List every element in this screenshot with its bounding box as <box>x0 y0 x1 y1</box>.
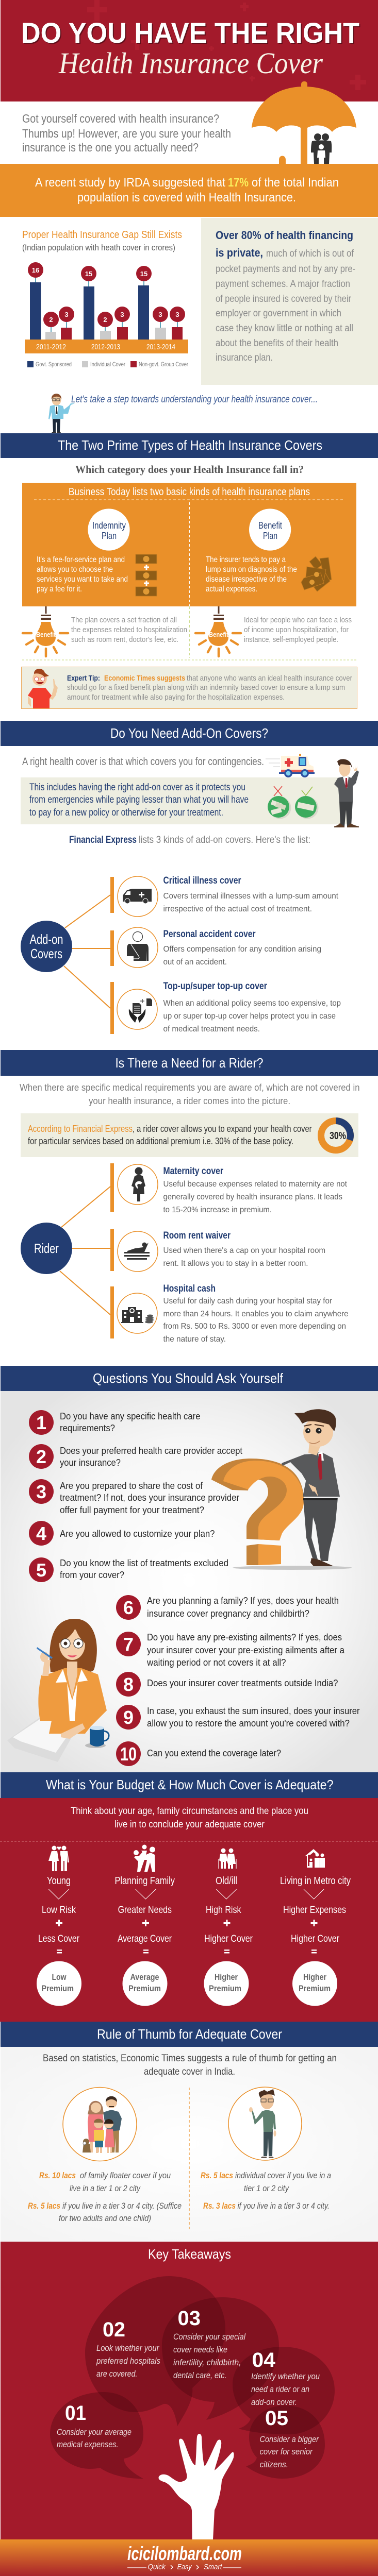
caption: step towards understanding: Let's take a step towards understanding your health insurance cover... <box>71 394 318 405</box>
heading band: rider <box>1 1050 378 1076</box>
question 4: 4 <box>36 1523 46 1544</box>
bar chart: health insurance gap: Proper Health Insurance Gap Still Exists <box>22 229 182 241</box>
hospital cash text: Useful for daily cash during your hospital stay for <box>163 1297 333 1306</box>
takeaway 02: Look whether your <box>96 2343 160 2353</box>
icon: raised hand <box>159 2434 234 2539</box>
column: young: Less Cover <box>38 1934 80 1944</box>
indemnity plan badge: Plan <box>102 531 117 541</box>
column: old or ill: Premium <box>209 1984 241 1993</box>
panel: IRDA statistic: 17% <box>228 176 249 190</box>
panel: IRDA statistic: population is covered with Health Insurance. <box>77 191 296 205</box>
panel: header <box>1 0 378 101</box>
maternity text: to 15-20% increase in premium. <box>163 1206 272 1214</box>
panel: budget <box>0 1798 378 2022</box>
bar chart: health insurance gap: 2011-2012 <box>36 343 66 351</box>
panel: expert tip: Economic Times suggests <box>104 674 185 683</box>
column: young: Young <box>47 1875 71 1887</box>
icon: woman with papers <box>7 1619 109 1762</box>
donut chart: 30% <box>321 1121 351 1150</box>
panel: expert tip: Expert Tip: <box>67 674 100 683</box>
donut chart: 30%: 30% <box>330 1130 346 1142</box>
icon: house with family <box>305 1849 325 1868</box>
column: planning family: Greater Needs <box>118 1905 172 1916</box>
question 10 <box>116 1741 281 1766</box>
panel: rider premium: for particular services based on additional premium i.e. 30% of the base policy. <box>28 1136 293 1146</box>
bar chart: health insurance gap <box>22 229 188 368</box>
panel: budget: live in to conclude your adequate cover <box>114 1819 265 1830</box>
question 6 <box>116 1595 339 1620</box>
text: plan covers fraction <box>71 616 187 644</box>
icon: expert character <box>28 669 58 708</box>
bar chart: health insurance gap: 3 <box>175 311 179 318</box>
icon: benefit bulb left: Benefit <box>36 631 56 638</box>
bar chart: health insurance gap: 3 <box>64 311 69 318</box>
question 8: Does your insurer cover treatments outside India? <box>147 1678 338 1688</box>
maternity text: Maternity cover <box>163 1166 223 1177</box>
text: ideal for people: instance, self-employed people. <box>244 635 338 644</box>
panel: rule of thumb: Based on statistics, Economic Times suggests a rule of thumb for getting an <box>43 2053 337 2064</box>
icon: personal accident sling <box>118 927 158 968</box>
takeaway 01: Consider your average <box>57 2427 132 2437</box>
top-up text: Top-up/super top-up cover <box>163 981 267 992</box>
takeaway 05: cover for senior <box>260 2447 313 2456</box>
heading band: two prime types: The Two Prime Types of Health Insurance Covers <box>58 437 322 453</box>
bar chart: health insurance gap: 15 <box>140 270 147 278</box>
rider node <box>21 1223 72 1274</box>
question 5: Do you know the list of treatments excluded <box>60 1558 228 1568</box>
panel: expert tip: amount for treatment while also paying for the hospitalization expenses. <box>67 693 285 702</box>
text: plan covers fraction: the expenses related to hospitalization <box>71 625 187 634</box>
text: individual cover amounts <box>201 2171 331 2211</box>
panel: health financing: insurance plan. <box>216 352 273 363</box>
bar chart: health insurance gap: 2 <box>103 316 107 324</box>
column: living in metro city: Higher Expenses <box>283 1905 346 1916</box>
chart legend: Govt. Sponsored <box>36 361 72 368</box>
heading band: rule of thumb: Rule of Thumb for Adequate Cover <box>97 2026 282 2042</box>
top-up text: of medical treatment needs. <box>163 1025 260 1033</box>
icon: maternity <box>118 1164 158 1205</box>
indemnity description: pay a fee for it. <box>37 585 82 594</box>
intro text: insurance is the one you actually need? <box>22 141 199 154</box>
benefit plan badge: Plan <box>263 531 277 541</box>
text: family cover amounts: Rs. 10 lacs <box>39 2171 76 2180</box>
question 5: from your cover? <box>60 1570 124 1580</box>
hospital cash text: from Rs. 500 to Rs. 3000 or even more depending on <box>163 1322 346 1331</box>
takeaway 04: 04 <box>252 2349 276 2371</box>
benefit description: actual expenses. <box>206 585 257 594</box>
text: family cover amounts: live in a tier 1 or 2 city <box>70 2183 141 2193</box>
icon: umbrella <box>252 81 356 164</box>
add-on node: Covers <box>30 946 62 961</box>
room rent text: Used when there's a cap on your hospital room <box>163 1246 325 1255</box>
panel: includes add-on: This includes having the right add-on cover as it protects you <box>29 782 245 793</box>
benefit plan badge <box>249 509 291 551</box>
text: individual cover amounts: individual cover if you live in a <box>235 2171 331 2180</box>
chart legend <box>27 361 188 368</box>
panel: questions <box>1 1391 378 1772</box>
intro text: Thumbs up! However, are you sure your health <box>22 127 231 140</box>
text: family cover amounts: for two adults and one child) <box>59 2213 151 2223</box>
takeaway 01 <box>57 2402 132 2449</box>
chart legend: Non-govt. Group Cover <box>139 361 188 368</box>
column: living in metro city <box>280 1849 351 2006</box>
panel: expert tip: should go for a fixed benefit plan along with an indemnity based cover to ensure a lump sum <box>67 683 345 692</box>
panel: expert tip: that anyone who wants an ideal health insurance cover <box>187 674 352 683</box>
icon: rupee notes <box>136 554 157 596</box>
takeaway 02: preferred hospitals <box>96 2356 160 2366</box>
column: old or ill: Old/ill <box>216 1875 237 1887</box>
text: financial express list <box>69 835 310 845</box>
question 2: your insurance? <box>60 1458 121 1468</box>
question 5: 5 <box>36 1560 46 1581</box>
personal accident text: Personal accident cover <box>163 929 256 940</box>
question 9: In case, you exhaust the sum insured, does your insurer <box>147 1706 360 1716</box>
question 3: treatment? If not, does your insurance provider <box>60 1493 239 1503</box>
question 9: 9 <box>123 1707 134 1728</box>
footer brand band: Smart <box>204 2563 222 2571</box>
column: old or ill: Higher <box>215 1972 238 1982</box>
takeaway 05: Consider a bigger <box>260 2434 319 2444</box>
icon: money pile <box>301 556 332 591</box>
text: ideal for people: Ideal for people who can face a loss <box>244 616 352 624</box>
panel: key takeaways <box>1 2242 378 2539</box>
column: planning family: Premium <box>128 1984 161 1993</box>
panel: budget: Think about your age, family circumstances and the place you <box>71 1806 308 1817</box>
takeaway 04: add-on cover. <box>251 2397 297 2407</box>
panel: IRDA statistic: A recent study by IRDA suggested that <box>35 176 225 190</box>
heading band: budget: What is Your Budget & How Much Cover is Adequate? <box>46 1777 333 1792</box>
maternity text: Useful because expenses related to maternity are not <box>163 1180 348 1189</box>
heading band: add-on covers <box>1 721 378 746</box>
heading band: two prime types <box>1 433 378 458</box>
panel: health financing: payment schemes. A major fraction <box>216 279 350 290</box>
panel: health financing: about the benefits of their health <box>216 338 338 349</box>
question 1: 1 <box>36 1412 46 1433</box>
icon: individual man <box>228 2087 302 2160</box>
panel: rule of thumb: adequate cover in India. <box>144 2066 235 2077</box>
add-on node: Add-on <box>30 931 63 947</box>
hospital cash text: more than 24 hours. It enables you to claim anywhere <box>163 1310 349 1318</box>
column: young: Low Risk <box>42 1905 76 1916</box>
takeaway 02: are covered. <box>96 2369 137 2379</box>
column: living in metro city: Higher Cover <box>291 1934 340 1944</box>
footer brand band: Quick <box>148 2563 166 2571</box>
title line 2: Health Insurance Cover <box>58 46 323 80</box>
text: individual cover amounts: if you live in a tier 3 or 4 city. <box>237 2201 330 2211</box>
question 4 <box>29 1521 215 1546</box>
room rent text: Room rent waiver <box>163 1230 231 1241</box>
heading band: budget <box>1 1772 378 1798</box>
question 9: allow you to restore the amount you're covered with? <box>147 1718 350 1728</box>
column: old or ill: High Risk <box>206 1905 241 1916</box>
heading band: rider: Is There a Need for a Rider? <box>116 1055 263 1071</box>
maternity text: generally covered by health insurance plans. It leads <box>163 1193 342 1201</box>
heading: key takeaways: Key Takeaways <box>148 2246 231 2262</box>
panel: health financing <box>201 218 378 385</box>
column: young <box>37 1845 81 2006</box>
text: financial express list: Financial Express <box>69 835 137 845</box>
footer brand band: icicilombard.com <box>127 2543 242 2564</box>
text: right health cover: A right health cover is that which covers you for contingencies. <box>22 756 264 768</box>
question 2: Does your preferred health care provider accept <box>60 1446 242 1456</box>
panel: rule of thumb <box>1 2047 378 2242</box>
takeaway 01: 01 <box>65 2402 86 2425</box>
text: rider intro <box>20 1082 360 1106</box>
panel: health financing: Over 80% of health financing <box>216 229 353 242</box>
panel: includes add-on: from emergencies while paying lesser than what you will have <box>29 794 249 805</box>
icon: top-up document hands <box>117 989 157 1029</box>
question 1 <box>29 1410 200 1435</box>
benefit plan badge: Benefit <box>258 520 282 531</box>
panel: health financing: much of which is out of <box>266 248 354 259</box>
panel: two plan types <box>22 483 356 606</box>
text: individual cover amounts: Rs. 3 lacs <box>203 2201 236 2211</box>
question 3: 3 <box>36 1481 46 1502</box>
critical illness text: Covers terminal illnesses with a lump-sum amount <box>163 892 339 901</box>
indemnity description: allows you to choose the <box>37 565 113 574</box>
text: family cover amounts: if you live in a tier 3 or 4 city. (Suffice <box>62 2201 182 2211</box>
personal accident text <box>163 929 321 967</box>
column: old or ill: Higher Cover <box>204 1934 253 1944</box>
takeaway 03: dental care, etc. <box>173 2370 227 2380</box>
diagram: rider tree <box>21 1163 349 1344</box>
text: rider intro: When there are specific medical requirements you are aware of, which are not covered in <box>20 1082 360 1093</box>
bar chart: health insurance gap: 3 <box>158 311 162 318</box>
icon: hospital bed <box>118 1231 158 1272</box>
indemnity description: It's a fee-for-service plan and <box>37 555 125 564</box>
icon: check and less money <box>295 787 319 819</box>
takeaway 03: Consider your special <box>173 2332 246 2342</box>
question 8: 8 <box>123 1674 134 1695</box>
panel: health financing: pocket payments and not by any pre- <box>216 264 355 275</box>
column: young: Low <box>52 1972 67 1982</box>
question 3: offer full payment for your treatment? <box>60 1505 204 1515</box>
hospital cash text <box>163 1283 349 1344</box>
icon: elderly couple <box>219 1849 236 1869</box>
column: living in metro city: Living in Metro city <box>280 1875 351 1887</box>
panel: health financing: case they know little or nothing at all <box>216 323 353 334</box>
personal accident text: out of an accident. <box>163 958 227 967</box>
text: rider intro: your health insurance, a rider comes into the picture. <box>89 1096 290 1106</box>
intro text: Got yourself covered with health insurance? <box>22 112 219 125</box>
takeaway 01: medical expenses. <box>57 2439 119 2449</box>
benefit description: The insurer tends to pay a <box>206 555 286 564</box>
takeaway 05 <box>260 2407 319 2469</box>
question 8 <box>116 1672 338 1697</box>
icon: benefit bulb right: Benefit <box>209 631 229 638</box>
question 7: Do you have any pre-existing ailments? If yes, does <box>147 1632 342 1642</box>
question 7: waiting period or not covers it at all? <box>146 1657 286 1668</box>
column: living in metro city: Higher <box>303 1972 326 1982</box>
takeaway 03: cover needs like <box>173 2345 227 2354</box>
panel: rider premium: , a rider cover allows you to expand your health cover <box>133 1124 311 1134</box>
bar chart: health insurance gap: 15 <box>85 270 92 278</box>
bar chart: health insurance gap: 3 <box>120 311 124 318</box>
question 7: your insurer cover your pre-existing ailments after a <box>147 1645 345 1655</box>
add-on node <box>21 921 72 972</box>
icon: thinking man <box>282 1409 340 1566</box>
heading band: rule of thumb <box>1 2022 378 2047</box>
text: individual cover amounts: Rs. 5 lacs <box>201 2171 233 2180</box>
icon: couple <box>48 1845 69 1871</box>
heading band: questions: Questions You Should Ask Yourself <box>93 1370 284 1386</box>
heading band: add-on covers: Do You Need Add-On Covers? <box>110 725 268 741</box>
panel: expert tip <box>22 667 357 709</box>
room rent text: rent. It allows you to stay in a better room. <box>163 1259 308 1268</box>
takeaway 04: Identify whether you <box>251 2371 320 2381</box>
panel: IRDA statistic <box>0 164 378 217</box>
takeaway 04 <box>251 2349 320 2407</box>
icon: ambulance <box>266 754 315 777</box>
question 5 <box>29 1557 228 1582</box>
bar chart: health insurance gap: 2 <box>49 316 53 324</box>
text: ideal for people: of income upon hospitalization, for <box>244 625 349 634</box>
question 3 <box>29 1479 239 1515</box>
icon: question mark <box>211 1459 352 1570</box>
column: living in metro city: Premium <box>299 1984 331 1993</box>
question 3: Are you prepared to share the cost of <box>60 1481 203 1491</box>
text: ideal for people <box>244 616 352 644</box>
indemnity plan badge <box>88 509 130 551</box>
takeaway 03: infertility, childbirth, <box>173 2358 241 2367</box>
panel: health financing: of people insured is covered by their <box>216 294 352 304</box>
question 1: requirements? <box>60 1423 115 1433</box>
takeaway 05: 05 <box>265 2407 288 2430</box>
panel: includes add-on: to pay for a new policy or otherwise for your treatment. <box>29 807 223 818</box>
rider node: Rider <box>34 1241 59 1256</box>
bar chart: health insurance gap: 2012-2013 <box>91 343 120 351</box>
question 4: Are you allowed to customize your plan? <box>60 1529 215 1539</box>
takeaway 04: need a rider or an <box>251 2384 309 2394</box>
column: planning family: Average Cover <box>118 1934 172 1944</box>
panel: health financing: is private, <box>216 246 263 259</box>
column: planning family: Planning Family <box>114 1875 175 1887</box>
critical illness text: Critical illness cover <box>163 875 241 886</box>
column: planning family <box>114 1844 175 2006</box>
critical illness text <box>163 875 339 913</box>
subheading: which category: Which category does your Health Insurance fall in? <box>75 463 304 476</box>
icon: family <box>311 133 332 164</box>
top-up text: up or super top-up cover helps protect you in case <box>163 1012 336 1021</box>
bar chart: health insurance gap: 16 <box>32 266 39 274</box>
question 6: insurance cover pregnancy and childbirth? <box>147 1608 309 1619</box>
hospital cash text: Hospital cash <box>163 1283 216 1294</box>
takeaway 02 <box>96 2318 160 2379</box>
critical illness text: irrespective of the actual cost of treatment. <box>163 905 312 913</box>
panel: rider premium <box>21 1113 358 1157</box>
question 6: Are you planning a family? If yes, does your health <box>147 1596 339 1606</box>
panel: IRDA statistic: of the total Indian <box>252 176 339 190</box>
icon: hospital cash <box>117 1293 157 1333</box>
icon: parents lifting child <box>134 1844 155 1872</box>
text: financial express list: lists 3 kinds of add-on covers. Here's the list: <box>139 835 310 845</box>
benefit description: disease irrespective of the <box>206 575 287 584</box>
text: family cover amounts: of family floater cover if you <box>80 2171 171 2180</box>
room rent text <box>163 1230 325 1268</box>
indemnity plan badge: Indemnity <box>92 520 126 531</box>
column: planning family: Average <box>130 1972 159 1982</box>
icon: presenter man <box>48 394 75 433</box>
diagram: add-on covers tree <box>21 875 341 1034</box>
text: plan covers fraction: The plan covers a set fraction of all <box>71 616 177 624</box>
chart legend: Individual Cover <box>90 361 125 368</box>
question 6: 6 <box>123 1597 134 1618</box>
takeaway 05: citizens. <box>260 2460 288 2469</box>
footer brand band <box>0 2539 378 2576</box>
benefit description <box>206 555 297 594</box>
text: family cover amounts: Rs. 5 lacs <box>28 2201 60 2211</box>
text: plan covers fraction: such as room rent, doctor's fee, etc. <box>71 635 178 644</box>
takeaway 02: 02 <box>103 2318 125 2341</box>
text: family cover amounts <box>28 2171 182 2223</box>
question 2: 2 <box>36 1446 46 1467</box>
icon: benefit bulb left <box>23 606 68 656</box>
question 1: Do you have any specific health care <box>60 1411 200 1421</box>
top-up text <box>163 981 341 1033</box>
bar chart: health insurance gap: (Indian population with heath cover in crores) <box>22 243 175 252</box>
question 2 <box>29 1444 242 1469</box>
benefit description: lump sum on diagnosis of the <box>206 565 297 574</box>
heading band: questions <box>1 1366 378 1391</box>
takeaway 03: 03 <box>177 2307 201 2330</box>
panel: health financing: employer or government in which <box>216 308 341 319</box>
panel: includes add-on <box>21 777 351 824</box>
question 9 <box>116 1705 360 1730</box>
bar chart: health insurance gap: 2013-2014 <box>146 343 175 351</box>
takeaway 03 <box>173 2307 246 2380</box>
indemnity description: services you want to take and <box>37 575 128 584</box>
personal accident text: Offers compensation for any condition arising <box>163 945 321 954</box>
footer brand band: Easy <box>177 2563 192 2571</box>
icon: cross and much money <box>268 786 291 819</box>
top-up text: When an additional policy seems too expensive, top <box>163 999 341 1008</box>
title line 1: DO YOU HAVE THE RIGHT <box>21 16 359 49</box>
question 10: 10 <box>120 1743 137 1765</box>
icon: benefit bulb right <box>195 606 241 656</box>
question 10: Can you extend the coverage later? <box>147 1748 281 1758</box>
question 7 <box>116 1632 345 1668</box>
icon: critical illness ambulance <box>118 876 158 917</box>
icon: family <box>63 2088 137 2161</box>
title shadow: DO YOU HAVE THE RIGHT <box>22 18 360 50</box>
text: individual cover amounts: tier 1 or 2 city <box>244 2183 289 2193</box>
column: old or ill <box>204 1849 253 2006</box>
icon: suit man okay <box>334 759 359 827</box>
speech bubbles <box>50 2276 335 2479</box>
maternity text <box>163 1166 348 1214</box>
question 7: 7 <box>123 1634 134 1655</box>
hospital cash text: the nature of stay. <box>163 1335 226 1344</box>
panel: rider premium: According to Financial Express <box>28 1124 133 1134</box>
panel: two plan types: Business Today lists two basic kinds of health insurance plans <box>69 486 310 498</box>
intro text <box>22 112 231 154</box>
indemnity description <box>37 555 128 594</box>
column: young: Premium <box>41 1984 74 1993</box>
